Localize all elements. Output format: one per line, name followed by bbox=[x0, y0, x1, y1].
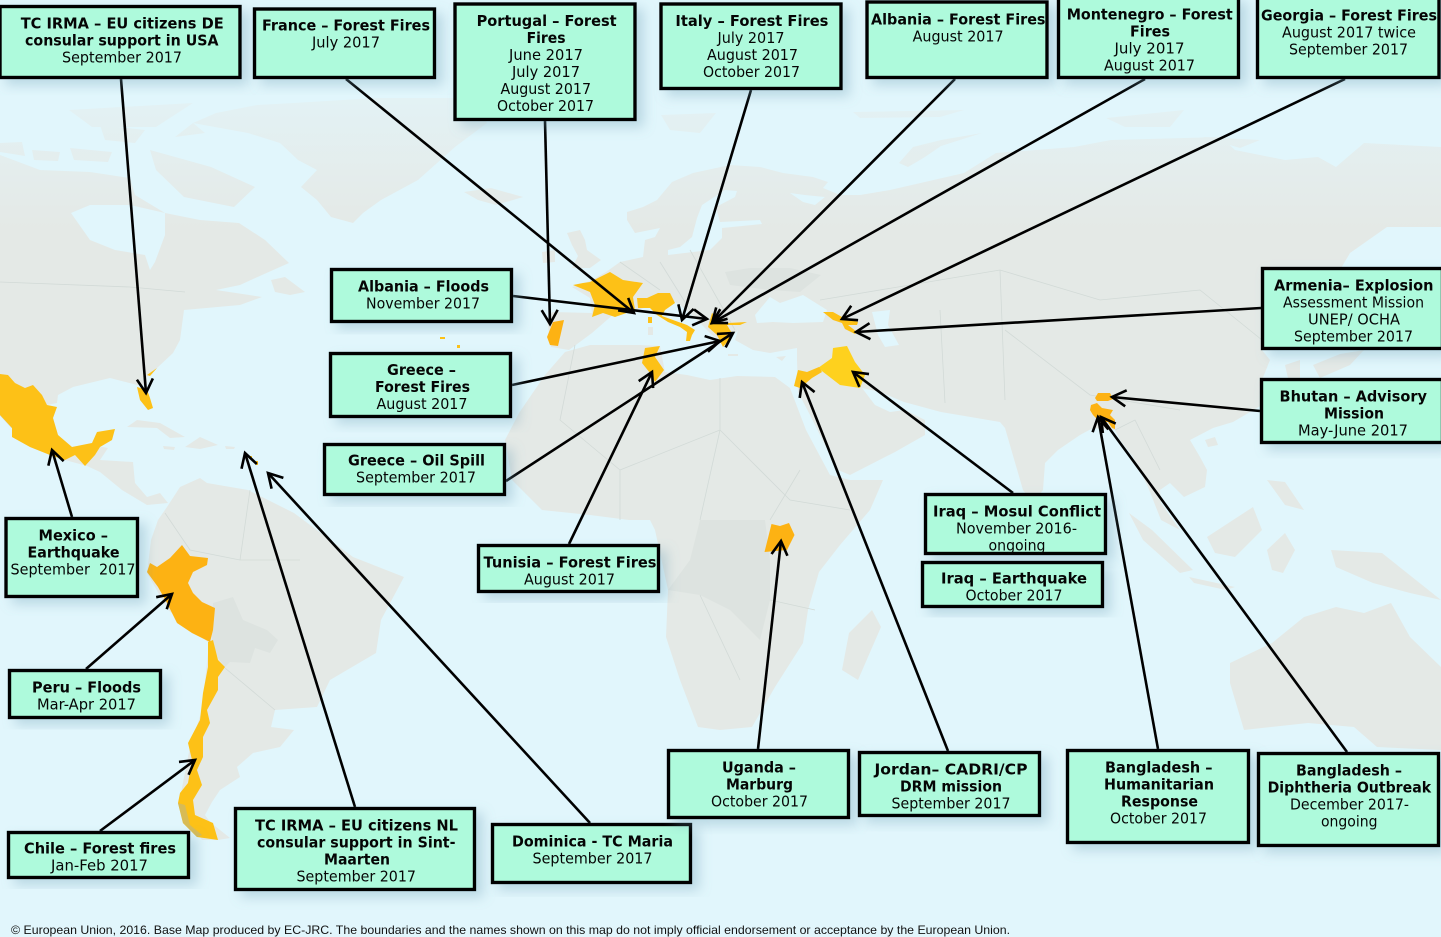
panel: Peru floods bbox=[10, 670, 160, 718]
land: Indonesia, Philippines, New Guinea bbox=[1129, 480, 1441, 600]
panel: Bangladesh diphtheria outbreak bbox=[1258, 754, 1438, 846]
arrow: Georgia bbox=[842, 79, 1345, 319]
panel: Albania floods: Albania – Floods bbox=[358, 278, 489, 296]
panel: TC IRMA EU citizens DE: September 2017 bbox=[62, 48, 182, 66]
land: Iceland bbox=[464, 188, 523, 205]
panel: TC IRMA EU citizens NL: Maarten bbox=[324, 850, 390, 868]
arrow: Bangladesh humanitarian bbox=[1098, 417, 1158, 749]
panel: Italy forest fires bbox=[661, 4, 841, 88]
land: Bolivia bbox=[212, 597, 278, 667]
panel: Jordan CADRI/CP: DRM mission bbox=[900, 778, 1002, 796]
arrow: Dominica bbox=[268, 473, 590, 823]
highlight: Tierra del Fuego fragments bbox=[178, 803, 202, 837]
highlight: Bhutan bbox=[1095, 393, 1113, 401]
panel: Armenia explosion: UNEP/ OCHA bbox=[1308, 310, 1401, 328]
highlight: Azores and Canaries bbox=[440, 337, 460, 348]
arrow: France bbox=[346, 79, 634, 313]
panel: Peru floods: Mar-Apr 2017 bbox=[37, 696, 136, 714]
land: Arctic Russian islands bbox=[661, 110, 1260, 167]
panel: Armenia explosion: Assessment Mission bbox=[1283, 294, 1424, 312]
arrow: Bangladesh diphtheria bbox=[1101, 417, 1347, 752]
panel: Dominica TC Maria: Dominica - TC Maria bbox=[512, 832, 673, 850]
arrow: TC IRMA NL bbox=[245, 453, 355, 807]
arrow: Iraq bbox=[853, 372, 1013, 493]
panel: Greece oil spill: September 2017 bbox=[356, 468, 476, 486]
panel: Armenia explosion: Armenia– Explosion bbox=[1274, 276, 1434, 294]
land: Mediterranean islands bbox=[648, 327, 786, 361]
highlight: Iraq bbox=[818, 346, 865, 388]
highlight: France bbox=[573, 272, 643, 317]
panel: Peru floods: Peru – Floods bbox=[32, 678, 141, 696]
panel: Bhutan advisory mission: May-June 2017 bbox=[1298, 422, 1408, 440]
panel: Uganda Marburg: Marburg bbox=[726, 776, 793, 794]
highlight: Chile bbox=[178, 640, 225, 840]
panel: Portugal forest fires: Portugal – Forest bbox=[477, 12, 617, 30]
arrow: Mexico bbox=[52, 450, 72, 517]
panel: Armenia explosion: September 2017 bbox=[1294, 328, 1413, 346]
arrow: Albania forest fires bbox=[712, 79, 955, 323]
panel: Montenegro forest fires: August 2017 bbox=[1104, 56, 1195, 74]
panel: Greece forest fires bbox=[330, 354, 510, 416]
highlight: Albania, Montenegro, Greece bbox=[708, 313, 747, 347]
land: Caribbean islands bbox=[163, 437, 235, 450]
arrow: Montenegro bbox=[712, 79, 1145, 323]
land: Japan and Korea bbox=[1285, 350, 1364, 380]
panel: France forest fires: July 2017 bbox=[311, 34, 380, 52]
arrow: Italy bbox=[682, 90, 751, 320]
panel: TC IRMA EU citizens NL: September 2017 bbox=[296, 868, 416, 886]
panel: Portugal forest fires: June 2017 bbox=[508, 46, 583, 64]
arrow: Bhutan bbox=[1112, 397, 1260, 411]
panel: Uganda Marburg bbox=[668, 750, 848, 818]
panel: Tunisia forest fires: August 2017 bbox=[524, 570, 615, 588]
panel: Georgia forest fires: Georgia – Forest Fires bbox=[1261, 6, 1437, 24]
arrow: Uganda bbox=[758, 541, 781, 749]
land: South America bbox=[147, 478, 404, 840]
land: DR Congo bbox=[668, 520, 770, 640]
arrow: Chile bbox=[100, 760, 195, 831]
highlight: Uganda bbox=[764, 523, 794, 552]
arrow: Albania floods bbox=[513, 296, 707, 319]
panel: Bangladesh humanitarian response: Humanitarian bbox=[1104, 776, 1214, 794]
panel: Chile forest fires: Chile – Forest fires bbox=[24, 840, 176, 858]
country borders bbox=[0, 250, 1262, 710]
panel: Bangladesh humanitarian response bbox=[1068, 750, 1248, 842]
land: Eurasia bbox=[547, 137, 1441, 530]
highlight: Dominica and Sint-Maarten bbox=[249, 456, 258, 465]
panel: Iraq Mosul conflict bbox=[926, 494, 1106, 554]
land: Newfoundland bbox=[271, 277, 305, 295]
water: Baltic Sea bbox=[668, 190, 762, 255]
panel: Mexico earthquake: September 2017 bbox=[10, 560, 136, 578]
panel: TC IRMA EU citizens NL: TC IRMA – EU citizens NL bbox=[255, 816, 458, 834]
panel: Italy forest fires: August 2017 bbox=[707, 46, 798, 64]
highlight: Italy bbox=[637, 293, 695, 341]
panel: Albania forest fires: Albania – Forest Fires bbox=[871, 10, 1046, 28]
panel: Uganda Marburg: October 2017 bbox=[711, 792, 808, 810]
panel: Iraq Mosul conflict: ongoing bbox=[988, 536, 1046, 554]
panel: Portugal forest fires: August 2017 bbox=[500, 80, 591, 98]
land: Arctic islands bbox=[0, 103, 255, 207]
panel: Greece forest fires: Forest Fires bbox=[375, 378, 470, 396]
panel: Iraq earthquake: October 2017 bbox=[966, 586, 1062, 604]
panel: Armenia explosion bbox=[1262, 268, 1441, 348]
panel: Bangladesh humanitarian response: Bangladesh – bbox=[1105, 758, 1212, 776]
water: Black Sea bbox=[755, 295, 827, 323]
panel: Jordan CADRI/CP: September 2017 bbox=[892, 794, 1010, 812]
panel: TC IRMA EU citizens DE: consular support in USA bbox=[25, 32, 219, 50]
panel: Montenegro forest fires: Fires bbox=[1130, 22, 1170, 40]
arrow: Armenia bbox=[856, 308, 1261, 332]
arrow: Tunisia bbox=[569, 372, 652, 544]
highlighted countries bbox=[0, 272, 1115, 840]
world base map bbox=[0, 98, 1441, 840]
panel: Bhutan advisory mission: Bhutan – Advisory bbox=[1280, 388, 1427, 406]
land: North and Central America bbox=[0, 155, 289, 505]
panel: Mexico earthquake bbox=[6, 518, 138, 596]
footer disclaimer: © European Union, 2016. Base Map produced by EC-JRC. The boundaries and the names shown on this map do not imply official endorsement or acceptance by the European Union. bbox=[11, 923, 1010, 937]
panel: Bangladesh diphtheria outbreak: ongoing bbox=[1321, 812, 1378, 830]
highlight: Peru bbox=[147, 545, 215, 642]
highlight: Bangladesh bbox=[1090, 403, 1115, 429]
panel: Dominica TC Maria: September 2017 bbox=[532, 850, 652, 868]
panel: Iraq Mosul conflict: Iraq – Mosul Conflict bbox=[933, 502, 1101, 520]
panel: Albania forest fires: August 2017 bbox=[913, 28, 1004, 46]
arrow: Jordan bbox=[802, 382, 948, 751]
panel: Mexico earthquake: Earthquake bbox=[28, 544, 120, 562]
panel: Jordan CADRI/CP bbox=[860, 752, 1040, 816]
panel: Uganda Marburg: Uganda – bbox=[722, 758, 796, 776]
land: Madagascar bbox=[842, 610, 881, 680]
arrow: Greece oil spill bbox=[506, 333, 733, 481]
arrow: Peru bbox=[86, 594, 172, 669]
land: Cuba bbox=[127, 420, 185, 438]
land: United Kingdom and Ireland bbox=[542, 230, 601, 268]
panel: Iraq earthquake bbox=[922, 562, 1102, 606]
panel: Greece oil spill: Greece – Oil Spill bbox=[348, 452, 485, 470]
panel: Dominica TC Maria bbox=[492, 824, 690, 882]
highlight: Portugal bbox=[547, 320, 564, 346]
land: Ukraine bbox=[725, 268, 821, 292]
panel: Montenegro forest fires: July 2017 bbox=[1113, 40, 1184, 58]
arrow: Greece forest fires bbox=[512, 341, 720, 385]
panel: Georgia forest fires: August 2017 twice bbox=[1282, 24, 1416, 42]
panel: Montenegro forest fires bbox=[1058, 0, 1238, 78]
panel: TC IRMA EU citizens NL bbox=[236, 808, 474, 890]
panel: Iraq earthquake: Iraq – Earthquake bbox=[941, 570, 1087, 588]
panel: Tunisia forest fires bbox=[478, 546, 658, 592]
panel: Montenegro forest fires: Montenegro – Forest bbox=[1067, 6, 1233, 24]
panel: Georgia forest fires bbox=[1258, 0, 1439, 78]
panel: Jordan CADRI/CP: Jordan– CADRI/CP bbox=[873, 760, 1028, 778]
highlight: Tunisia bbox=[642, 346, 664, 382]
land: Greenland bbox=[193, 98, 487, 223]
panel: Italy forest fires: July 2017 bbox=[717, 29, 784, 47]
arrow: TC IRMA DE bbox=[121, 79, 146, 393]
panel: France forest fires: France – Forest Fires bbox=[262, 16, 430, 34]
panel: Bangladesh humanitarian response: October 2017 bbox=[1110, 810, 1207, 828]
panel: Portugal forest fires bbox=[455, 4, 635, 120]
panel: Greece forest fires: August 2017 bbox=[376, 395, 468, 413]
panel: Albania floods bbox=[332, 270, 512, 322]
land: Hainan bbox=[1205, 437, 1218, 447]
panel: Greece oil spill bbox=[324, 444, 504, 494]
panel: Italy forest fires: October 2017 bbox=[703, 63, 800, 81]
panel: Georgia forest fires: September 2017 bbox=[1289, 40, 1408, 58]
land: Africa bbox=[505, 345, 883, 730]
panel: TC IRMA EU citizens DE bbox=[0, 6, 240, 78]
panel: Albania floods: November 2017 bbox=[366, 294, 480, 312]
panel: France forest fires bbox=[254, 9, 434, 78]
panel: Bangladesh diphtheria outbreak: Diphtheria Outbreak bbox=[1268, 778, 1432, 796]
panel: Bhutan advisory mission bbox=[1262, 380, 1441, 442]
panel: Portugal forest fires: October 2017 bbox=[497, 97, 594, 115]
highlight: Florida and Atlantic coast bbox=[137, 368, 157, 410]
arrow: Portugal bbox=[545, 121, 550, 324]
panel: Portugal forest fires: Fires bbox=[527, 29, 566, 47]
panel: Greece forest fires: Greece – bbox=[387, 361, 456, 379]
water: Hudson Bay bbox=[71, 205, 165, 270]
panel: Bangladesh humanitarian response: Response bbox=[1121, 792, 1198, 810]
panel: Mexico earthquake: Mexico – bbox=[38, 526, 108, 544]
panel: TC IRMA EU citizens NL: consular support in Sint- bbox=[257, 834, 456, 852]
highlight: Mexico bbox=[0, 374, 115, 466]
panel: Iraq Mosul conflict: November 2016- bbox=[956, 520, 1077, 538]
panel: Bangladesh diphtheria outbreak: December 2017- bbox=[1290, 796, 1409, 814]
panel: Bangladesh diphtheria outbreak: Bangladesh – bbox=[1296, 762, 1402, 780]
panel: Chile forest fires bbox=[8, 832, 188, 878]
panel: Portugal forest fires: July 2017 bbox=[511, 63, 580, 81]
panel: Chile forest fires: Jan-Feb 2017 bbox=[50, 856, 148, 874]
panel: Tunisia forest fires: Tunisia – Forest Fires bbox=[484, 554, 657, 572]
panel: TC IRMA EU citizens DE: TC IRMA – EU citizens DE bbox=[21, 14, 224, 32]
panel: Albania forest fires bbox=[867, 2, 1047, 78]
panel: Bhutan advisory mission: Mission bbox=[1324, 404, 1384, 422]
highlight: Georgia and Armenia bbox=[823, 312, 858, 334]
highlight: Jordan bbox=[794, 367, 822, 388]
land: Australia bbox=[1230, 603, 1441, 750]
panel: Italy forest fires: Italy – Forest Fires bbox=[675, 12, 828, 30]
water: White Sea bbox=[790, 193, 825, 205]
water: Caspian Sea bbox=[872, 310, 899, 347]
